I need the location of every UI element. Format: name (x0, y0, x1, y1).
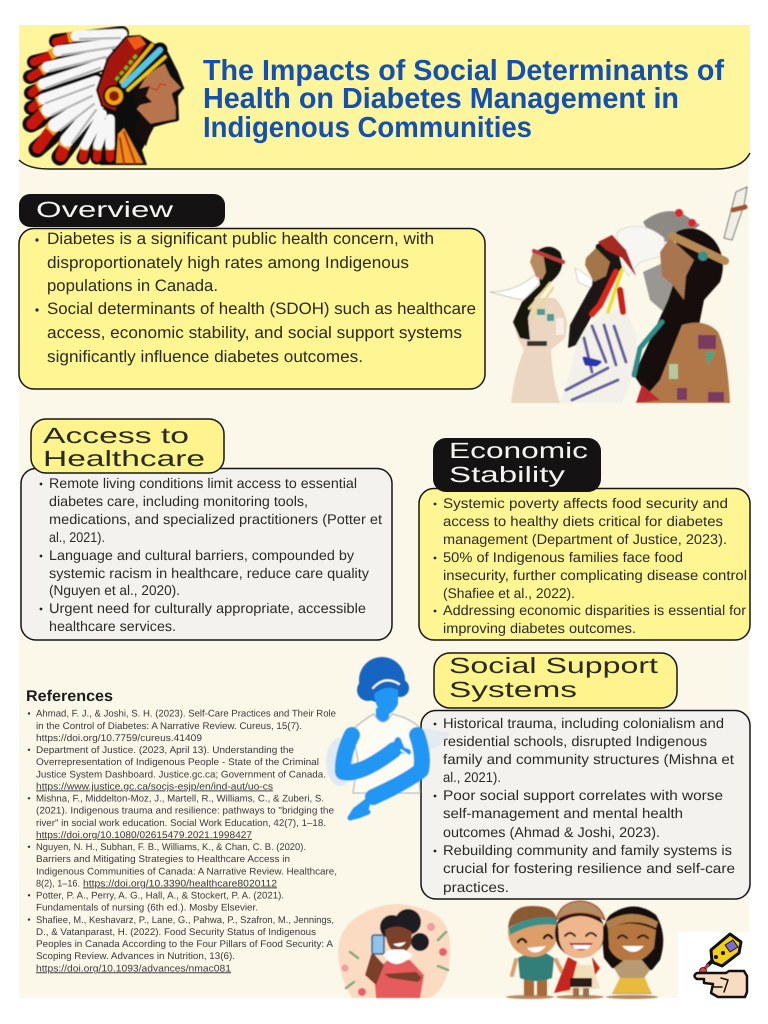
overview bullet text (35, 230, 476, 366)
access bullet text (40, 475, 382, 634)
social bullet text: outcomes (Ahmad & Joshi, 2023). (443, 824, 660, 840)
economic body box (419, 488, 750, 640)
references list: Potter, P. A., Perry, A. G., Hall, A., & Stockert, P. A. (2021). (36, 890, 284, 902)
overview bullet text: Diabetes is a significant public health concern, with (47, 230, 434, 248)
social bullet text: self-management and mental health (443, 805, 683, 821)
illustration: woman giving herself an insulin injection (326, 657, 450, 818)
overview bullet text: significantly influence diabetes outcomes. (47, 348, 363, 366)
references list: Indigenous Communities of Canada: A Narrative Review. Healthcare, (36, 866, 337, 877)
access heading pill: Access to (43, 423, 189, 448)
social body box (421, 710, 750, 899)
icon: blood glucose meter and finger (678, 932, 749, 998)
economic bullet text: access to healthy diets critical for diabetes (443, 513, 723, 529)
economic bullet text: 50% of Indigenous families face food (443, 549, 683, 565)
references list: https://doi.org/10.1080/02615479.2021.1998427 (36, 830, 252, 841)
social bullet text: crucial for fostering resilience and self-care (443, 860, 735, 876)
references list: river" in social work education. Social Work Education, 42(7), 1–18. (36, 818, 326, 829)
economic bullet text (434, 495, 747, 636)
economic bullet text: management (Department of Justice, 2023). (443, 531, 727, 547)
references list: https://doi.org/10.1093/advances/nmac081 (36, 963, 231, 974)
economic bullet text: improving diabetes outcomes. (443, 620, 636, 636)
overview heading pill (19, 194, 225, 227)
social bullet text: Historical trauma, including colonialism and (443, 715, 724, 731)
social heading pill: Social Support (449, 653, 658, 678)
panel: social support systems (421, 653, 750, 899)
access bullet text: Remote living conditions limit access to essential (49, 475, 357, 491)
references heading: References (26, 688, 113, 705)
references list: Scoping Review. Advances in Nutrition, 13(6). (36, 951, 235, 962)
references list: Fundamentals of nursing (6th ed.). Mosby Elsevier. (36, 903, 258, 914)
references list: https://www.justice.gc.ca/socjs-esjp/en/ind-aut/uo-cs (36, 781, 273, 792)
access bullet text: Language and cultural barriers, compounded by (49, 547, 354, 563)
economic heading pill (433, 438, 601, 492)
access body box (21, 468, 392, 640)
header banner (19, 25, 750, 169)
overview bullet text: disproportionately high rates among Indigenous (47, 254, 409, 272)
access bullet text: al., 2021). (49, 529, 105, 545)
references (26, 688, 337, 974)
social bullet text: residential schools, disrupted Indigenous (443, 733, 707, 749)
references list: Department of Justice. (2023, April 13). Understanding the (36, 745, 294, 756)
access bullet text: Urgent need for culturally appropriate, accessible (49, 600, 366, 616)
references list: Nguyen, N. H., Subhan, F. B., Williams, K., & Chan, C. B. (2020). (36, 842, 306, 853)
references list: Ahmad, F. J., & Joshi, S. H. (2023). Self-Care Practices and Their Role (36, 709, 336, 720)
social bullet text (434, 715, 735, 895)
economic bullet text: insecurity, further complicating disease control (443, 567, 747, 583)
references list: Justice System Dashboard. Justice.gc.ca; Government of Canada. (36, 769, 326, 780)
icon: chief in feather headdress (30, 33, 184, 165)
overview bullet text: populations in Canada. (47, 277, 218, 295)
references list: Peoples in Canada According to the Four Pillars of Food Security: A (36, 939, 334, 950)
social bullet text: Rebuilding community and family systems is (443, 842, 732, 858)
access bullet text: medications, and specialized practitioners (Potter et (49, 511, 382, 527)
social bullet text: family and community structures (Mishna et (443, 751, 734, 767)
social bullet text: practices. (443, 879, 509, 895)
references list: Shafiee, M., Keshavarz, P., Lane, G., Pahwa, P., Szafron, M., Jennings, (36, 915, 334, 926)
economic heading pill: Stability (449, 462, 565, 487)
overview bullet text: Social determinants of health (SDOH) such as healthcare (47, 300, 476, 318)
illustration: three Indigenous women in profile (490, 187, 747, 403)
social heading pill (434, 653, 677, 708)
references list: https://doi.org/10.3390/healthcare8020112 (83, 878, 277, 889)
panel: economic stability (419, 438, 750, 640)
panel: access to healthcare (21, 419, 392, 640)
access bullet text: diabetes care, including monitoring tools, (49, 493, 308, 509)
references list (28, 709, 337, 974)
overview body box (19, 228, 485, 389)
references list: in the Control of Diabetes: A Narrative Review. Cureus, 15(7). (36, 721, 302, 732)
economic heading pill: Economic (449, 438, 588, 463)
title (203, 55, 724, 144)
references list: (2021). Indigenous trauma and resilience: pathways to "bridging the (36, 806, 334, 817)
overview heading pill: Overview (36, 197, 173, 222)
access bullet text: systemic racism in healthcare, reduce care quality (49, 565, 369, 581)
access bullet text: healthcare services. (49, 618, 176, 634)
economic bullet text: Systemic poverty affects food security and (443, 495, 728, 511)
social bullet text: al., 2021). (443, 769, 501, 785)
references list: D., & Vatanparast, H. (2022). Food Security Status of Indigenous (36, 927, 316, 938)
access bullet text: (Nguyen et al., 2020). (49, 582, 180, 598)
illustration: three smiling children (506, 901, 663, 999)
references list: Barriers and Mitigating Strategies to Healthcare Access in (36, 854, 290, 865)
title: The Impacts of Social Determinants of (203, 55, 724, 87)
overview bullet text: access, economic stability, and social support systems (47, 324, 462, 342)
title: Health on Diabetes Management in (203, 83, 679, 115)
illustration: girl holding a phone (338, 904, 450, 998)
panel: overview (19, 194, 485, 389)
social bullet text: Poor social support correlates with worse (443, 787, 723, 803)
title: Indigenous Communities (203, 112, 532, 144)
references list: https://doi.org/10.7759/cureus.41409 (36, 733, 202, 744)
social heading pill: Systems (449, 677, 577, 702)
economic bullet text: (Shafiee et al., 2022). (443, 585, 575, 601)
references list: Mishna, F., Middelton-Moz, J., Martell, R., Williams, C., & Zuberi, S. (36, 794, 324, 804)
references list: Overrepresentation of Indigenous People - State of the Criminal (36, 757, 319, 768)
references list: 8(2), 1–16. (36, 878, 80, 889)
access heading pill (31, 419, 224, 473)
economic bullet text: Addressing economic disparities is essential for (443, 602, 746, 618)
access heading pill: Healthcare (43, 446, 205, 471)
